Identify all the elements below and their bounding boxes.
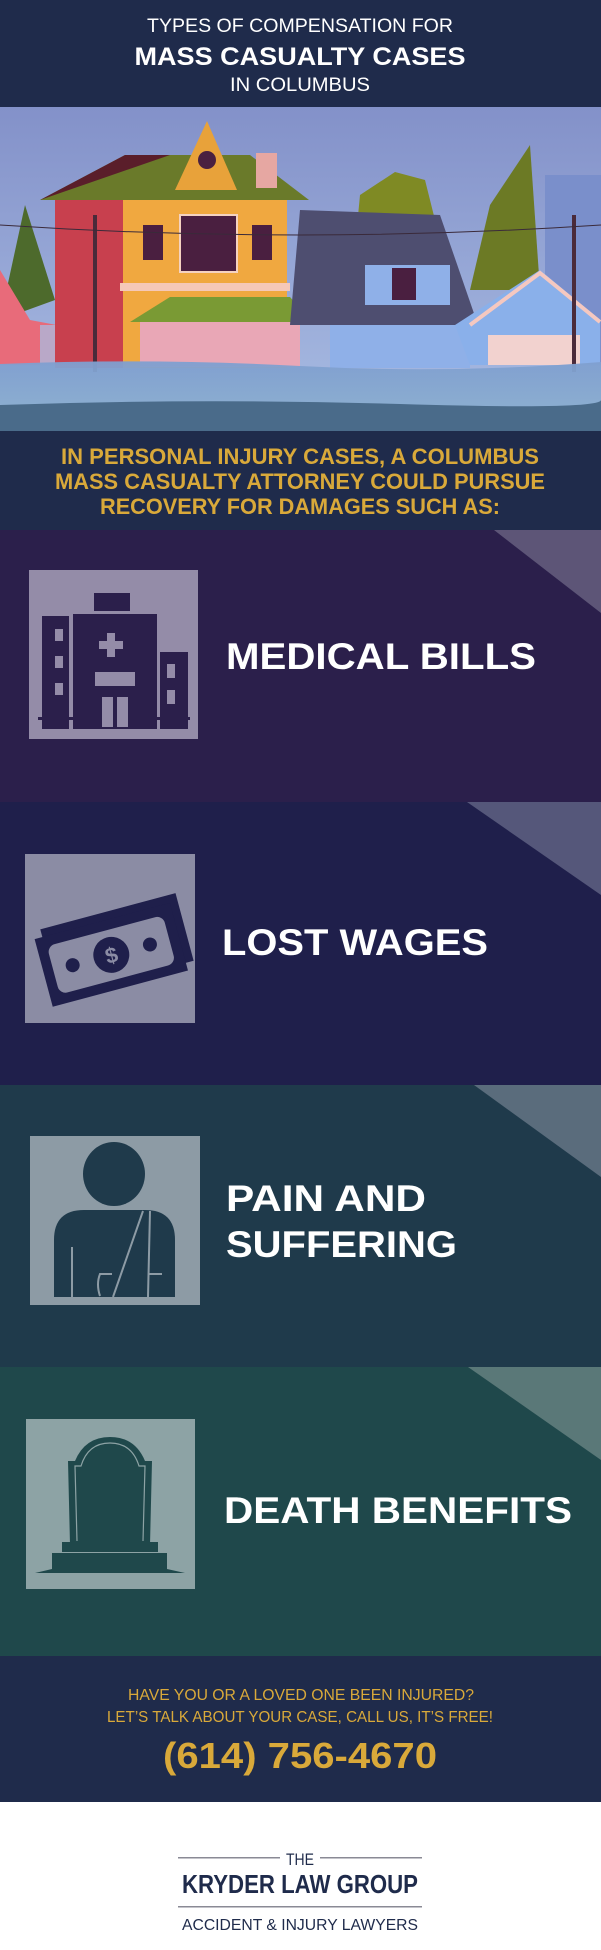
label: lost wages: LOST WAGES xyxy=(222,922,488,963)
blue house xyxy=(290,210,478,325)
icon: tombstone xyxy=(26,1419,195,1589)
header panel xyxy=(0,0,601,107)
label: medical bills: MEDICAL BILLS xyxy=(226,636,536,677)
subheader band: RECOVERY FOR DAMAGES SUCH AS: xyxy=(100,494,500,519)
icon: hospital xyxy=(29,570,198,739)
subheader band xyxy=(0,431,601,530)
panel: medical bills xyxy=(0,530,601,802)
call to action panel: LET’S TALK ABOUT YOUR CASE, CALL US, IT’S FREE! xyxy=(107,1709,493,1726)
icon: injured person xyxy=(30,1136,200,1305)
logo: KRYDER LAW GROUP xyxy=(182,1869,418,1899)
logo: ACCIDENT & INJURY LAWYERS xyxy=(182,1917,418,1934)
left pink house xyxy=(0,270,110,365)
logo: THE xyxy=(286,1850,314,1869)
call to action panel xyxy=(0,1656,601,1802)
label: pain and suffering: PAIN AND xyxy=(226,1178,426,1219)
title: MASS CASUALTY CASES xyxy=(134,43,466,71)
cta text: HAVE YOU OR A LOVED ONE BEEN INJURED? xyxy=(128,1687,474,1704)
intro text: IN PERSONAL INJURY CASES, A COLUMBUS xyxy=(61,444,539,469)
water xyxy=(0,361,601,431)
trees xyxy=(350,172,455,300)
panel: lost wages xyxy=(0,802,601,1085)
logo xyxy=(178,1850,422,1934)
main house xyxy=(55,200,125,368)
garage house xyxy=(455,270,600,365)
panel: pain and suffering xyxy=(0,1085,601,1367)
header line 3: IN COLUMBUS xyxy=(230,75,370,96)
panel: death benefits xyxy=(0,1367,601,1656)
icon: money: $ xyxy=(102,942,121,969)
icon: money xyxy=(25,854,196,1023)
power poles xyxy=(93,215,97,372)
phone number: (614) 756-4670 xyxy=(163,1735,437,1776)
panel: pain and suffering: SUFFERING xyxy=(226,1224,457,1265)
subheader band: MASS CASUALTY ATTORNEY COULD PURSUE xyxy=(55,469,545,494)
header line 1: TYPES OF COMPENSATION FOR xyxy=(147,16,453,37)
label: death benefits: DEATH BENEFITS xyxy=(224,1490,572,1531)
illustration: flooded houses xyxy=(0,107,601,431)
